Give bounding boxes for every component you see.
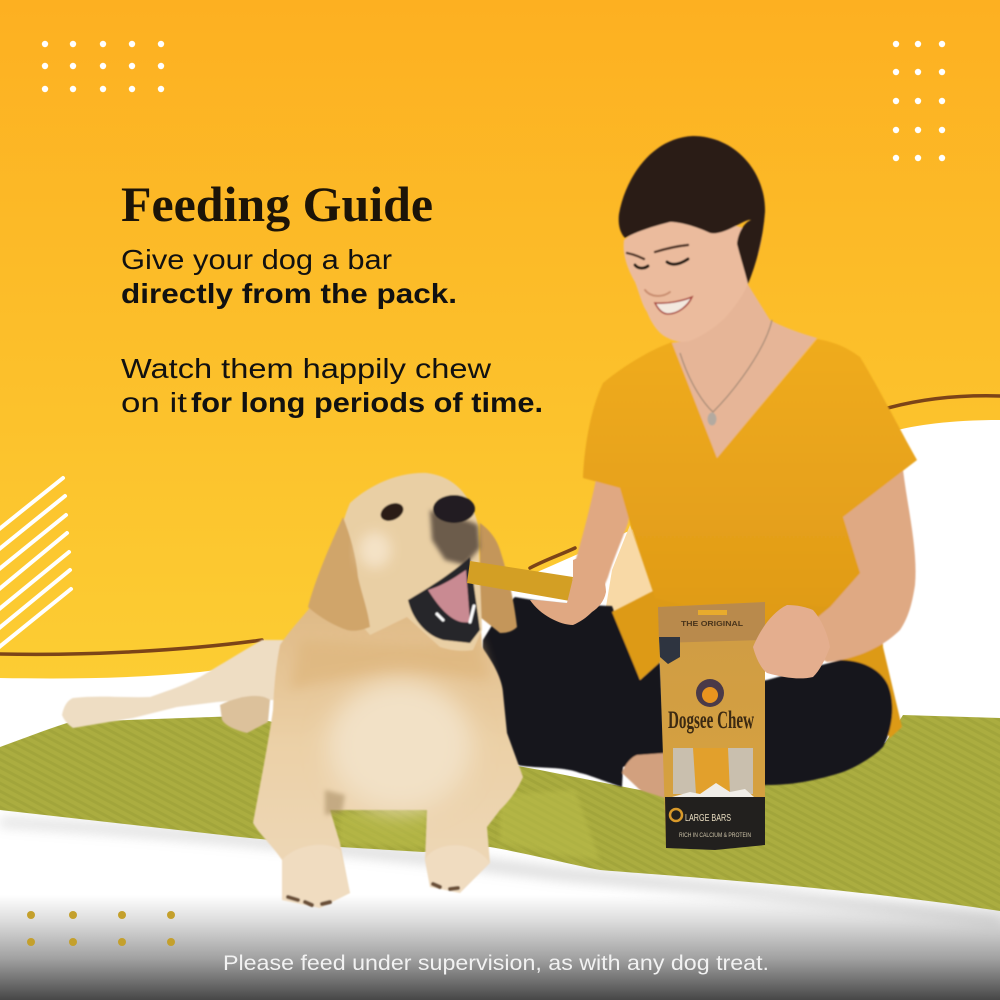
pack: window with bar [673,748,753,794]
pack: bar in window [693,748,730,794]
pack: small label text: RICH IN CALCIUM & PROTEIN [679,833,751,839]
pack: logo dog face [702,687,718,703]
dog: neck shade [290,640,490,690]
dot grid: top right [893,41,945,161]
product pack [658,602,765,850]
dog: eye [378,500,406,524]
dot grid: top left [42,41,164,92]
pack: yellow tab [698,610,727,615]
dog: open mouth [408,557,480,643]
woman: necklace [680,320,772,412]
woman: shirt body [583,339,917,625]
woman: eyes [635,259,688,268]
woman: smile [655,297,692,314]
dog: body [253,605,523,908]
dog: head [338,473,482,651]
pack: kraft body [658,602,765,845]
woman: nose shade [645,290,670,296]
woman's hand holding bar [530,556,606,625]
dog: chest shadow [325,790,345,815]
woman: neck and chest [672,283,817,458]
pack: dark tag [659,637,680,664]
green mat [0,715,1000,911]
dog: left ear [308,517,370,631]
dog: nose [433,495,475,523]
mat shadow [0,818,1000,925]
bottom grey gradient [0,895,1000,1000]
woman: right pants leg [660,660,892,790]
title: Feeding Guide [121,176,433,232]
pack: mountain edge [672,783,754,797]
woman: shirt lower hem [612,560,902,738]
dog: dark muzzle [430,510,480,565]
footer note: Please feed under supervision, as with any dog treat. [223,952,769,975]
woman's hand holding pack [753,605,830,678]
dot grid: bottom left [27,911,175,946]
woman: pendant [708,412,716,426]
brown wave line [0,396,1000,654]
text block: watch them chew: Watch them happily chew [121,353,492,384]
pack: logo [696,679,724,707]
pack: top flap [658,602,765,643]
dog: far hind paw [220,696,270,733]
dog: left paw toes [288,897,330,905]
dog: left front paw [282,845,350,908]
dog: cheek highlight [359,532,391,568]
text block: watch them chew [121,353,543,418]
dog: tongue [428,570,470,622]
dog: right paw toes [433,884,458,889]
cream patch behind arm [605,525,660,613]
dog: chest fur [328,680,472,810]
text block: watch them chew: on it [121,387,187,418]
dog: right ear [480,523,517,633]
dog: right front paw [425,845,490,893]
pack: black footer label [665,797,765,850]
woman: right arm [790,470,916,662]
diagonal white stripes [0,478,71,648]
woman: face [624,215,751,342]
pack: ring icon [670,809,682,821]
woman: left pants leg [483,597,665,787]
mat bright centre [340,790,600,860]
dog [62,473,523,908]
text block: give your dog a bar: directly from the pack. [121,278,457,309]
woman: left arm [574,470,632,606]
text block: give your dog a bar: Give your dog a bar [121,244,392,275]
woman [483,136,917,798]
pack: large bars label: LARGE BARS [685,813,731,824]
woman: brows [627,245,688,259]
woman: hair [619,136,765,284]
pack: header text: THE ORIGINAL [681,621,744,628]
text block: watch them chew: for long periods of time. [191,387,543,418]
woman: ear [740,222,762,267]
yellow gradient background wave [0,0,1000,678]
chew bar in dog's mouth [467,561,573,601]
dog: teeth [437,606,474,622]
pack: brand name: Dogsee Chew [668,707,754,734]
woman: bare foot [622,753,665,798]
dog: back leg and paw [62,640,290,728]
text block: give your dog a bar [121,244,457,309]
